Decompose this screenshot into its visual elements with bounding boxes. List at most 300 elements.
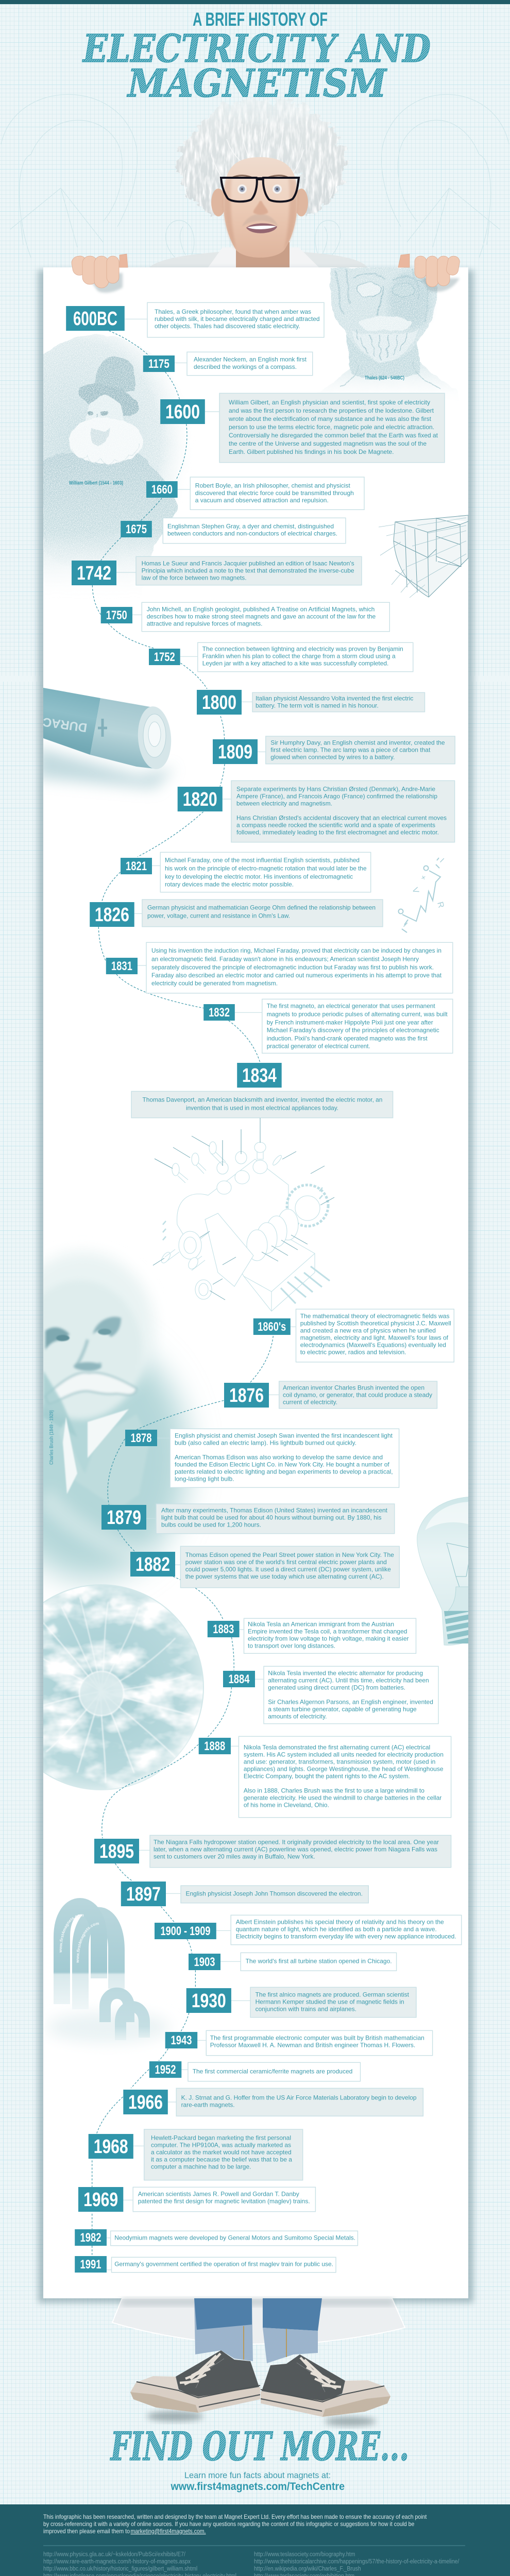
year badge: 1982 <box>80 2231 101 2245</box>
description <box>176 2088 423 2116</box>
year badge: 600BC <box>73 308 117 330</box>
description <box>244 1618 416 1653</box>
year badge <box>72 561 136 585</box>
event: 1742 <box>72 556 362 585</box>
event: 1175 <box>143 352 313 376</box>
description: system. His AC system included all units needed for electricity production <box>244 1751 444 1758</box>
description: bulb (also called an electric lamp). His lightbulb burned out quickly. <box>175 1439 356 1447</box>
description: Thomas Edison opened the Pearl Street power station in New York City. The <box>185 1551 394 1558</box>
event: 1930 <box>186 1987 416 2018</box>
year badge: 1895 <box>99 1841 134 1862</box>
sources column right: http://www.teslasociety.com/biography.htm <box>254 2552 355 2558</box>
description: Professor Maxwell H. A. Newman and British engineer Thomas H. Flowers. <box>210 2042 415 2049</box>
scientist lower body: coat, legs and shoes <box>112 2298 405 2426</box>
event: 1883 <box>208 1618 416 1653</box>
description: attractive and repulsive forces of magnets. <box>147 620 263 628</box>
description: American scientists James R. Powell and Gordan T. Danby <box>138 2191 299 2198</box>
description: K. J. Strnat and G. Hoffer from the US Air Force Materials Laboratory begin to develop <box>181 2094 417 2102</box>
description: first electric lamp. The arc lamp was a piece of carbon that <box>270 747 431 754</box>
description: Michael Faraday's discovery of the principles of electromagnetic <box>267 1027 439 1034</box>
year badge <box>106 958 146 974</box>
event: 1600 <box>160 393 445 463</box>
illustration: circuit diagram sketch: V <box>410 887 420 895</box>
description: power, voltage, current and resistance in Ohm's Law. <box>147 912 290 920</box>
description: rotary devices made the electric motor possible. <box>165 881 294 888</box>
event: 1968 <box>89 2129 303 2180</box>
description <box>133 2187 315 2212</box>
year badge: 1860's <box>258 1320 286 1334</box>
description: Neodymium magnets were developed by General Motors and Sumitomo Special Metals. <box>114 2234 355 2242</box>
year badge <box>189 1954 241 1970</box>
year badge: 1884 <box>229 1672 250 1686</box>
description: Franklin when his plan to collect the charge from a storm cloud using a <box>202 653 396 660</box>
description: Earth. Gilbert published his findings in his book De Magnete. <box>229 448 394 455</box>
illustration: Charles Brush portrait <box>43 1250 203 1592</box>
event: 1800 <box>197 690 424 715</box>
hands gripping the panel <box>71 254 461 293</box>
description: by French instrument-maker Hippolyte Pixii just one year after <box>267 1019 433 1026</box>
description: electrodynamics (Maxwell's Equations) eventually led <box>300 1342 446 1349</box>
description: battery. The term volt is named in his honour. <box>256 702 379 709</box>
description <box>170 1429 399 1487</box>
description: Separate experiments by Hans Christian Ørsted (Denmark), Andre-Marie <box>236 786 435 793</box>
finger shadows <box>85 273 460 293</box>
credits paragraph: This infographic has been researched, written and designed by the team at Magnet Expert Ltd. Every effort has been made to ensure the accuracy of each point <box>43 2513 427 2520</box>
description: Robert Boyle, an Irish philosopher, chemist and physicist <box>195 482 350 489</box>
event: 1826 <box>90 900 383 927</box>
description <box>231 781 455 842</box>
event: 1860's <box>253 1309 454 1362</box>
event: 1903 <box>189 1953 397 1971</box>
event: 1879 <box>101 1504 395 1534</box>
illustration: circuit diagram sketch <box>399 857 446 933</box>
year badge: 1968 <box>94 2136 128 2158</box>
description <box>180 1546 399 1588</box>
event: 1821 <box>121 852 371 892</box>
description: amounts of electricity. <box>268 1713 327 1720</box>
description: separately discovered the principle of electromagnetic induction but Faraday was first to publish his work. <box>151 964 434 971</box>
description: generate electricity. He used the windmill to charge batteries in the cellar <box>244 1794 441 1802</box>
description: William Gilbert, an English physician and scientist, first spoke of electricity <box>229 399 430 406</box>
description <box>198 642 413 672</box>
description: Englishman Stephen Gray, a dyer and chemist, distinguished <box>167 523 334 530</box>
sources column left: http://www.rare-earth-magnets.com/t-history-of-magnets.aspx <box>43 2559 191 2565</box>
year badge <box>197 690 252 715</box>
description: generated using direct current (DC) from batteries. <box>268 1684 405 1691</box>
description: The first programmable electronic computer was built by British mathematician <box>210 2035 424 2042</box>
description: magnetism, electricity and light. Maxwell's four laws of <box>300 1334 449 1342</box>
description: current of electricity. <box>283 1399 337 1406</box>
year badge: 1834 <box>242 1065 277 1087</box>
description: Principia which included a note to the text that demonstrated the inverse-cube <box>142 567 354 574</box>
description: of his home in Cleveland, Ohio. <box>244 1802 329 1809</box>
shoe shadows <box>147 2411 203 2421</box>
faint horseshoe magnet sketches <box>1 94 509 258</box>
illustration: plasma ball <box>43 1584 204 1790</box>
illustration: circuit diagram sketch: I <box>401 921 409 929</box>
ears <box>211 189 226 216</box>
description: Hewlett-Packard began marketing the first personal <box>151 2134 291 2142</box>
year badge <box>199 1738 239 1754</box>
year badge: 1821 <box>126 859 147 873</box>
year badge <box>121 858 160 874</box>
illustration: circuit diagram sketch: I <box>438 857 446 865</box>
description: an electromagnetic field. Faraday wasn't alone in his endeavours; American scientist Joseph Henry <box>151 956 419 963</box>
description: described the workings of a compass. <box>194 363 297 370</box>
neck <box>236 242 290 267</box>
title: Electricity and Magnetism <box>82 27 431 106</box>
year badge: 1991 <box>80 2258 101 2272</box>
description: Sir Humphry Davy, an English chemist and inventor, created the <box>270 739 445 747</box>
year badge <box>165 2032 206 2048</box>
sources column right: http://www.thehistoricalarchive.com/happenings/57/the-history-of-electricity-a-timeline/ <box>254 2559 460 2565</box>
year badge <box>89 2134 144 2159</box>
description: Alexander Neckem, an English monk first <box>194 356 307 363</box>
description <box>142 602 389 632</box>
description <box>241 1953 397 1971</box>
shirt collar <box>208 247 319 267</box>
description: glowed when connected by wires to a battery. <box>270 754 395 761</box>
illustration: William Gilbert portrait <box>43 334 180 574</box>
description: Electric Company, bought the patent rights to the AC system. <box>244 1773 410 1780</box>
year badge: 1742 <box>77 563 111 584</box>
description: a compass needle rocked the scientific world and a spate of experiments <box>236 822 435 829</box>
event: 1809 <box>213 736 455 764</box>
dashed timeline <box>92 331 273 2255</box>
connector from 1834 text to motor drawing <box>260 1118 261 1143</box>
description <box>156 1504 395 1534</box>
description: other objects. Thales had discovered static electricity. <box>155 323 300 330</box>
description <box>181 1886 368 1903</box>
description: coil dynamo, or generator, that could produce a steady <box>283 1392 432 1399</box>
description: power station was one of the world's first central electric power plants and <box>185 1558 387 1566</box>
year badge: 1878 <box>131 1431 151 1445</box>
description <box>144 2129 303 2180</box>
year badge <box>125 1430 170 1446</box>
description: to electric power, radios and television. <box>300 1349 406 1356</box>
shoulders and coat <box>149 251 367 267</box>
title: Electricity and Magnetism: ELECTRICITY AND <box>82 27 431 71</box>
year badge <box>160 399 219 424</box>
caption: Thales: Thales (624 - 546BC) <box>365 376 404 381</box>
description <box>250 1987 416 2018</box>
illustration: horseshoe magnets <box>49 1898 167 2044</box>
footer <box>0 2504 510 2576</box>
description: Thales, a Greek philosopher, found that when amber was <box>155 308 311 315</box>
description: induction. Pixii's hand-crank operated magneto was the first <box>267 1035 428 1042</box>
credits paragraph: by cross-referencing it with a variety of online sources. If you have any questions regarding the content of this infographic or suggestions for how it could be <box>43 2520 415 2528</box>
description: alternating current (AC). Until this time, electricity had been <box>268 1677 429 1684</box>
sources column left: http://www.bbc.co.uk/history/historic_figures/gilbert_william.shtml <box>43 2566 197 2572</box>
credits paragraph: improved then please email them to <box>43 2528 130 2535</box>
right shoe <box>261 2354 390 2417</box>
description: person to use the terms electric force, magnetic pole and electric attraction. <box>229 423 434 431</box>
event: 600BC <box>66 302 324 337</box>
description: the power systems that we use today which use alternating current (AC). <box>185 1573 384 1580</box>
illustration: battery <box>43 688 174 794</box>
description: electricity from low voltage to high voltage, making it easier <box>248 1635 409 1642</box>
description: bulbs could be used for 1,200 hours. <box>161 1521 261 1529</box>
main white panel with drop shadow <box>38 267 473 2303</box>
year badge: 1876 <box>229 1385 264 1406</box>
event: 1660 <box>146 477 364 510</box>
year badge: 1952 <box>155 2063 176 2077</box>
description: light bulb that could be used for about 40 hours without burning out. By 1880, his <box>161 1514 381 1521</box>
scientist figure: head and shoulders <box>149 100 367 267</box>
description <box>239 1736 451 1818</box>
description <box>262 999 453 1053</box>
description <box>150 1835 451 1868</box>
year badge <box>121 521 163 537</box>
event: 1675 <box>121 518 346 544</box>
description: The Niagara Falls hydropower station opened. It originally provided electricity to the local area. One year <box>154 1839 439 1846</box>
event: 1882 <box>130 1546 399 1588</box>
description: Hans Christian Ørsted's accidental discovery that an electrical current moves <box>236 815 447 822</box>
description: Italian physicist Alessandro Volta invented the first electric <box>256 695 413 702</box>
caption: Charles Brush: Charles Brush (1849 - 1929) <box>49 1410 55 1465</box>
description: and was the first person to research the properties of the lodestone. Gilbert <box>229 407 434 414</box>
description: rare-earth magnets. <box>181 2102 235 2109</box>
description: The world's first all turbine station opened in Chicago. <box>246 1958 392 1965</box>
description: practical generator of electrical current. <box>267 1043 370 1050</box>
year badge: 1809 <box>218 741 252 763</box>
description: a calculator as the market would not have accepted <box>151 2149 292 2156</box>
description: Hermann Kemper studied the use of magnetic fields in <box>256 1998 404 2006</box>
description <box>231 1915 462 1945</box>
description: Controversially he disregarded the common belief that the Earth was fixed at <box>229 432 438 439</box>
year badge: 1879 <box>107 1507 141 1529</box>
call to action <box>171 2470 345 2493</box>
illustration: battery: DURACELL <box>19 711 88 735</box>
description: a vacuum and observed attraction and repulsion. <box>195 497 329 504</box>
year badge: 1175 <box>148 357 169 371</box>
description: Germany's government certified the operation of first maglev train for public use. <box>114 2261 333 2268</box>
description: Faraday also described an electric motor and carried out numerous experiments in his attempt to prove that <box>151 972 442 979</box>
left hand <box>71 254 128 288</box>
description <box>188 2062 361 2081</box>
description: magnets to produce periodic pulses of alternating current, was built <box>267 1011 448 1018</box>
year badge <box>146 481 190 498</box>
description: After many experiments, Thomas Edison (United States) invented an incandescent <box>161 1507 388 1514</box>
credits paragraph: marketing@first4magnets.com. <box>131 2528 206 2535</box>
description <box>160 852 371 892</box>
description: John Michell, an English geologist, published A Treatise on Artificial Magnets, which <box>147 606 375 613</box>
year badge <box>94 1839 150 1863</box>
year badge: 1826 <box>95 904 129 926</box>
year badge <box>101 1505 156 1530</box>
event: 1895 <box>94 1835 451 1868</box>
event: 1966 <box>123 2088 423 2116</box>
description: and created a new era of physics when he unified <box>300 1327 436 1334</box>
mouth <box>246 223 277 233</box>
year badge: 1831 <box>111 959 132 973</box>
eyebrows <box>232 176 288 178</box>
year badge: 1903 <box>194 1955 215 1969</box>
coat tail <box>112 2298 405 2344</box>
year badge: 1600 <box>165 401 200 423</box>
illustration: exploded motor drawing <box>153 1118 334 1311</box>
trouser legs <box>194 2298 253 2361</box>
description: Michael Faraday, one of the most influential English scientists, published <box>165 856 360 863</box>
top header bar <box>0 0 510 4</box>
description: English physicist Joseph John Thomson discovered the electron. <box>185 1890 363 1897</box>
year badge <box>143 355 187 372</box>
event: 1878 <box>125 1429 399 1487</box>
title: Electricity and Magnetism: MAGNETISM <box>126 62 387 106</box>
caption: William Gilbert: William Gilbert (1544 - 1603) <box>69 481 123 486</box>
description: German physicist and mathematician George Ohm defined the relationship between <box>147 904 376 911</box>
event: 1750 <box>101 602 389 632</box>
year badge <box>224 1383 279 1408</box>
description: American inventor Charles Brush invented the open <box>283 1384 424 1392</box>
description <box>146 942 453 993</box>
year badge <box>149 649 198 665</box>
description <box>264 1666 438 1724</box>
description: appliances) and lights. George Westinghouse, the head of Westinghouse <box>244 1766 444 1773</box>
description: The first alnico magnets are produced. German scientist <box>256 1991 410 1998</box>
illustration: Thales bust <box>328 267 450 389</box>
description: describes how to make strong steel magnets and gave an account of the law for the <box>147 613 376 620</box>
illustration: circuit diagram sketch: R <box>435 901 446 909</box>
year badge: 1800 <box>202 692 236 714</box>
event: 1969 <box>78 2187 315 2212</box>
year badge <box>101 607 142 623</box>
description: it as a computer because the belief was that to be a <box>151 2156 292 2163</box>
illustration: light bulb <box>417 1497 468 1646</box>
description <box>252 692 424 712</box>
description <box>111 2257 336 2273</box>
description: Albert Einstein publishes his special theory of relativity and his theory on the <box>236 1919 444 1926</box>
face <box>224 157 297 258</box>
description: The mathematical theory of electromagnetic fields was <box>300 1313 449 1320</box>
title: A Brief History Of: A BRIEF HISTORY OF <box>193 9 328 30</box>
event: 1943 <box>165 2030 433 2056</box>
event: 1884 <box>223 1666 438 1724</box>
description <box>111 2231 358 2246</box>
description: and use: generator, transformers, transmission system, motor (used in <box>244 1758 435 1766</box>
description: computer. The HP9100A, was actually marketed as <box>151 2142 291 2149</box>
call to action: Learn more fun facts about magnets at: <box>184 2470 331 2480</box>
description <box>279 1381 437 1409</box>
wild white hair <box>178 100 346 217</box>
description: long-lasting light bulb. <box>175 1476 234 1483</box>
year badge: 1969 <box>83 2189 118 2211</box>
year badge <box>223 1671 264 1687</box>
event: 1876 <box>224 1381 437 1409</box>
description: patents related to electric lighting and began experiments to develop a practical, <box>175 1468 393 1476</box>
event: 1982 <box>75 2229 358 2246</box>
right hand <box>398 254 461 287</box>
credits paragraph <box>43 2513 427 2535</box>
description: Leyden jar with a key attached to a kite was successfully completed. <box>202 660 388 667</box>
description: sent to customers over 20 miles away in Buffalo, New York. <box>154 1853 315 1860</box>
year badge: 1966 <box>128 2092 163 2113</box>
description: American Thomas Edison was also working to develop the same device and <box>175 1454 383 1461</box>
description: Electricity begins to transform everyday life with every new appliance introduced. <box>236 1933 456 1940</box>
description: invention that is used in most electrical appliances today. <box>186 1104 338 1111</box>
description: discovered that electric force could be transmitted through <box>195 489 354 497</box>
event: 1820 <box>178 781 455 842</box>
year badge <box>203 1004 262 1021</box>
description: key to developing the electric motor. His inventions of electromagnetic <box>165 873 353 880</box>
description: Nikola Tesla demonstrated the first alternating current (AC) electrical <box>244 1744 430 1751</box>
description: The first magneto, an electrical generator that uses permanent <box>267 1003 435 1010</box>
description: wrote about the electrification of many substance and he was also the first <box>228 415 432 422</box>
description <box>136 556 362 585</box>
sources column left: http://www.physics.gla.ac.uk/~kskeldon/PubSci/exhibits/E7/ <box>43 2552 186 2558</box>
description <box>163 518 346 544</box>
sources column right: http://en.wikipedia.org/wiki/Charles_F._Brush <box>254 2566 361 2572</box>
glasses <box>221 178 299 201</box>
event: 1888 <box>199 1736 451 1818</box>
description <box>131 1091 393 1118</box>
year badge: 1883 <box>213 1622 234 1636</box>
description <box>296 1309 454 1362</box>
left shoe <box>130 2350 260 2413</box>
description: founded the Edison Electric Light Co. in New York City. He bought a number of <box>175 1461 389 1468</box>
description: a steam turbine generator, capable of generating huge <box>268 1706 417 1713</box>
illustration: horseshoe magnets: www.first4magnets.com <box>60 1914 83 1953</box>
year badge <box>186 1988 250 2013</box>
year badge <box>66 306 147 331</box>
illustration: circuit diagram sketch: + <box>418 874 428 882</box>
description: between conductors and non-conductors of electrical charges. <box>167 530 337 537</box>
event: 1752 <box>149 642 413 672</box>
description <box>142 900 383 927</box>
eyes <box>237 184 247 194</box>
year badge: 1820 <box>183 789 217 810</box>
description: patented the first design for magnetic levitation (maglev) trains. <box>138 2198 310 2205</box>
description <box>219 393 445 463</box>
description: The first commercial ceramic/ferrite magnets are produced <box>193 2068 352 2075</box>
event: 1952 <box>149 2061 361 2081</box>
year badge <box>121 1882 181 1906</box>
description: to transport over long distances. <box>248 1642 335 1650</box>
description: followed, immediately leading to the first electromagnet and electric motor. <box>236 829 439 836</box>
description: rubbed with silk, it became electrically charged and attracted <box>155 315 320 323</box>
description: English physicist and chemist Joseph Swan invented the first incandescent light <box>175 1432 393 1439</box>
year badge: 1888 <box>204 1739 225 1753</box>
year badge: 1930 <box>192 1990 226 2012</box>
sources column left <box>43 2552 240 2576</box>
description: conjunction with trains and airplanes. <box>256 2006 356 2013</box>
description: The connection between lightning and electricity was proven by Benjamin <box>202 646 403 653</box>
description: Thomas Davenport, an American blacksmith and inventor, invented the electric motor, an <box>142 1096 382 1103</box>
year badge: 1660 <box>151 483 173 497</box>
description: between electricity and magnetism. <box>236 800 332 807</box>
description: quantum nature of light, which he identified as both a particle and a wave. <box>236 1926 437 1933</box>
description <box>187 352 313 376</box>
year badge: 1750 <box>106 608 127 622</box>
description <box>266 736 455 764</box>
year badge: 1882 <box>135 1554 170 1575</box>
description: published by Scottish theoretical physicist J.C. Maxwell <box>300 1320 451 1327</box>
event: 1900 - 1909 <box>155 1915 462 1945</box>
description: Sir Charles Algernon Parsons, an English engineer, invented <box>268 1699 433 1706</box>
year badge: 1897 <box>126 1884 161 1905</box>
event: 1834 <box>131 1063 393 1118</box>
panel illustrations <box>43 256 468 2044</box>
description: computer a machine had to be large. <box>151 2163 251 2171</box>
description: the centre of the Universe and suggested magnetism was the soul of the <box>229 440 427 447</box>
event: 1897 <box>121 1882 368 1906</box>
description: electricity could be generated from magnetism. <box>151 979 278 987</box>
event: 1991 <box>75 2256 336 2273</box>
illustration: wireframe magnetic field cube <box>379 515 468 598</box>
sources column right <box>254 2552 466 2576</box>
description: Nikola Tesla an American immigrant from the Austrian <box>248 1621 394 1628</box>
year badge <box>75 2229 111 2246</box>
